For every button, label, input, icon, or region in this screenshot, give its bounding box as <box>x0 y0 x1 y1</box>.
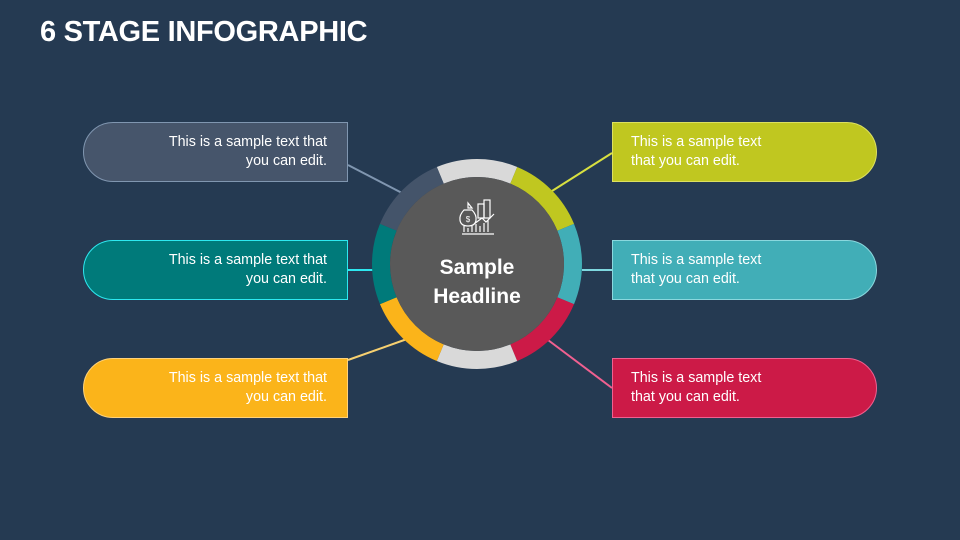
icon: money bag and buildings: $ <box>466 215 471 224</box>
box: left 2 <box>83 240 348 300</box>
title: 6 STAGE INFOGRAPHIC <box>40 16 367 48</box>
center circle <box>390 177 564 351</box>
connector lines <box>348 153 612 388</box>
box: right 1: that you can edit. <box>631 153 740 169</box>
box: right 1: This is a sample text <box>631 134 761 150</box>
box: left 1 <box>83 122 348 182</box>
box: right 3 <box>612 358 877 418</box>
icon: money bag and buildings <box>460 200 494 234</box>
ring segments <box>352 139 602 389</box>
box: left 3 <box>83 358 348 418</box>
box: right 2: This is a sample text <box>631 252 761 268</box>
box: right 2 <box>612 240 877 300</box>
box: left 2: This is a sample text that <box>169 252 327 268</box>
box: left 3: you can edit. <box>246 389 327 405</box>
box: right 2: that you can edit. <box>631 271 740 287</box>
box: left 1: This is a sample text that <box>169 134 327 150</box>
box: right 3: that you can edit. <box>631 389 740 405</box>
box: left 2: you can edit. <box>246 271 327 287</box>
connectors and ring: Headline <box>433 285 521 308</box>
box: left 1: you can edit. <box>246 153 327 169</box>
box: left 3: This is a sample text that <box>169 370 327 386</box>
box: right 3: This is a sample text <box>631 370 761 386</box>
center headline: Sample <box>440 256 514 279</box>
box: right 1 <box>612 122 877 182</box>
